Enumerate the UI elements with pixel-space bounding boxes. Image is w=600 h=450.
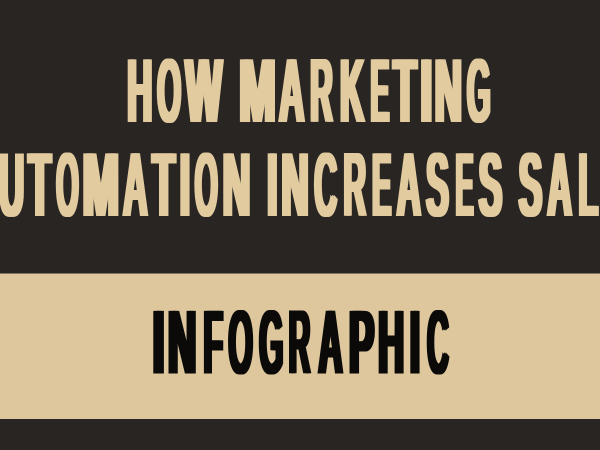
banner label: F (203, 292, 223, 394)
infographic cover: G (467, 41, 491, 142)
banner label: G (259, 292, 283, 394)
title line 2: U (0, 135, 24, 236)
banner label: I (153, 292, 164, 394)
banner label: H (378, 292, 404, 394)
title line 2: I (180, 135, 190, 236)
title line 1: H (127, 41, 152, 142)
title line 1: R (310, 41, 333, 142)
title line 1: A (279, 41, 304, 142)
banner label: R (289, 292, 310, 394)
title line 2 (0, 135, 600, 236)
title line 2: S (426, 135, 449, 236)
title line 2: E (456, 135, 474, 236)
title line 2: N (282, 135, 309, 236)
title line 2: R (344, 135, 366, 236)
title line 2: A (397, 135, 421, 236)
banner label: A (318, 292, 342, 394)
banner label: I (410, 292, 420, 394)
title line 1: N (435, 41, 462, 142)
banner: C (427, 292, 449, 394)
banner (0, 274, 600, 419)
title line 2: N (223, 135, 250, 236)
title line 1: W (186, 41, 222, 142)
title line 1: O (157, 41, 181, 142)
title line 1: I (421, 41, 432, 142)
title line 1: T (393, 41, 417, 142)
banner label: N (168, 292, 196, 394)
title line 2: S (519, 135, 542, 236)
title line 1: E (370, 41, 389, 142)
title line 2: I (267, 135, 277, 236)
banner label: O (228, 292, 253, 394)
title line 2: S (479, 135, 502, 236)
title line 2: C (314, 135, 337, 236)
title line 2: M (83, 135, 119, 236)
title line 1: K (340, 41, 364, 142)
title line 2: T (152, 135, 175, 236)
title line 2: A (123, 135, 148, 236)
title line 1 (127, 41, 491, 142)
banner label: P (349, 292, 374, 394)
title line 2: O (56, 135, 79, 236)
title line 2: O (195, 135, 218, 236)
title line 1: M (239, 41, 276, 142)
title line 2: T (28, 135, 51, 236)
title line 2: E (372, 135, 391, 236)
